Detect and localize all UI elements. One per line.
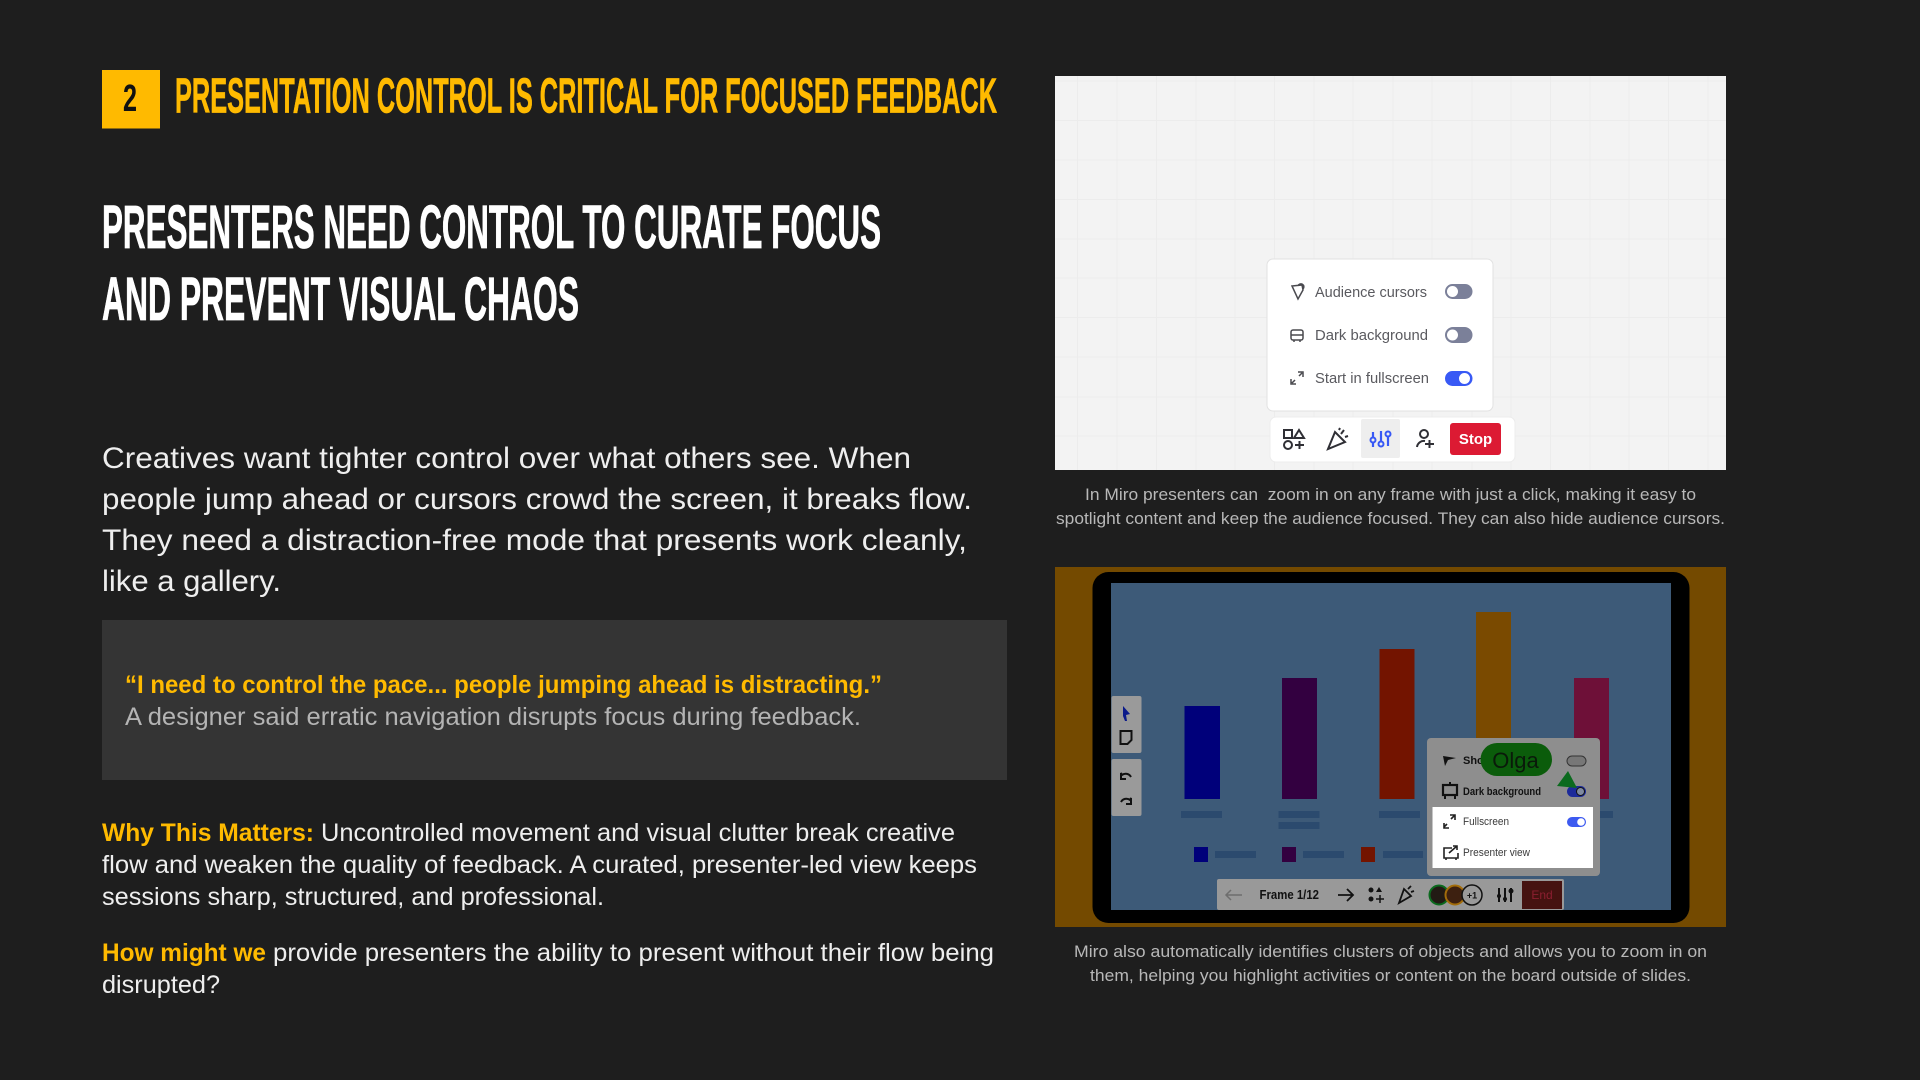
settings popup: [1427, 738, 1600, 876]
presenter toolbar: [1270, 417, 1515, 462]
why this matters text: Uncontrolled movement and visual clutter break creative: [321, 819, 955, 847]
icon: confetti: [1328, 428, 1348, 449]
caption: first screenshot: spotlight content and keep the audience focused. They can also hide audience cursors.: [1056, 509, 1725, 528]
settings panel: Audience cursors: [1315, 285, 1427, 301]
main headline: [102, 193, 881, 333]
screenshot: Miro presenter settings: [1055, 76, 1726, 470]
toggle: audience cursors off: [1445, 284, 1472, 299]
why this matters text: sessions sharp, structured, and professional.: [102, 883, 604, 911]
left tool rail: [1112, 696, 1142, 816]
caption: second screenshot: [1074, 942, 1707, 985]
quote callout: “I need to control the pace... people jumping ahead is distracting.”: [125, 671, 882, 699]
why this matters text: [102, 819, 977, 911]
highlighted options: [1432, 807, 1593, 868]
frame toolbar: +1: [1467, 890, 1477, 900]
why this matters text: Why This Matters:: [102, 819, 314, 847]
intro paragraph: like a gallery.: [102, 565, 281, 598]
how might we text: disrupted?: [102, 971, 220, 999]
icon: fullscreen: [1291, 372, 1303, 384]
intro paragraph: Creatives want tighter control over what others see. When: [102, 442, 911, 475]
section number badge: 2: [123, 78, 137, 120]
frame toolbar: Frame 1/12: [1260, 888, 1319, 902]
caption: second screenshot: them, helping you highlight activities or content on the board outside of slides.: [1090, 966, 1691, 985]
highlighted options: Fullscreen: [1463, 816, 1509, 828]
tablet frame: [1092, 572, 1690, 923]
collaborator cursor: Olga: Olga: [1492, 748, 1539, 773]
settings popup: Sho: [1463, 755, 1484, 767]
settings popup: Dark background: [1463, 786, 1541, 798]
why this matters text: flow and weaken the quality of feedback. A curated, presenter-led view keeps: [102, 851, 977, 879]
toggle: dark background off: [1445, 327, 1472, 343]
intro paragraph: They need a distraction-free mode that presents work cleanly,: [102, 524, 967, 557]
icon: shapes: [1284, 430, 1304, 449]
frame toolbar: [1217, 879, 1564, 910]
settings panel: Start in fullscreen: [1315, 371, 1429, 387]
main headline: AND PREVENT VISUAL CHAOS: [102, 265, 579, 333]
how might we text: [102, 939, 994, 999]
icon: sliders highlighted: [1361, 419, 1400, 458]
settings panel: [1267, 259, 1493, 411]
stop button: Stop: [1459, 431, 1492, 448]
toggle: fullscreen on: [1445, 371, 1472, 386]
frame toolbar: End: [1531, 888, 1553, 902]
screenshot: tablet with board: [1055, 567, 1726, 927]
settings panel: Dark background: [1315, 328, 1428, 344]
how might we text: provide presenters the ability to present without their flow being: [273, 939, 994, 967]
section heading: PRESENTATION CONTROL IS CRITICAL FOR FOCUSED FEEDBACK: [175, 70, 997, 124]
board screen: [1111, 583, 1671, 910]
bar chart: [1181, 612, 1613, 829]
chart legend: [1194, 847, 1423, 862]
caption: first screenshot: [1056, 485, 1725, 528]
collaborator cursor: Olga: [1480, 743, 1577, 788]
caption: second screenshot: Miro also automatically identifies clusters of objects and allows you to zoom in on: [1074, 942, 1707, 961]
highlighted options: Presenter view: [1463, 847, 1530, 859]
icon: dark background: [1291, 330, 1303, 342]
main headline: PRESENTERS NEED CONTROL TO CURATE FOCUS: [102, 193, 881, 261]
caption: first screenshot: In Miro presenters can zoom in on any frame with just a click, making it easy to: [1085, 485, 1696, 504]
stop button: [1450, 423, 1501, 455]
quote callout: [102, 620, 1007, 780]
how might we text: How might we: [102, 939, 266, 967]
icon: audience cursors: [1292, 284, 1304, 299]
quote callout: A designer said erratic navigation disrupts focus during feedback.: [125, 703, 861, 731]
icon: add person: [1417, 430, 1434, 448]
intro paragraph: [102, 442, 972, 598]
intro paragraph: people jump ahead or cursors crowd the screen, it breaks flow.: [102, 483, 972, 516]
section number badge: [102, 70, 160, 128]
